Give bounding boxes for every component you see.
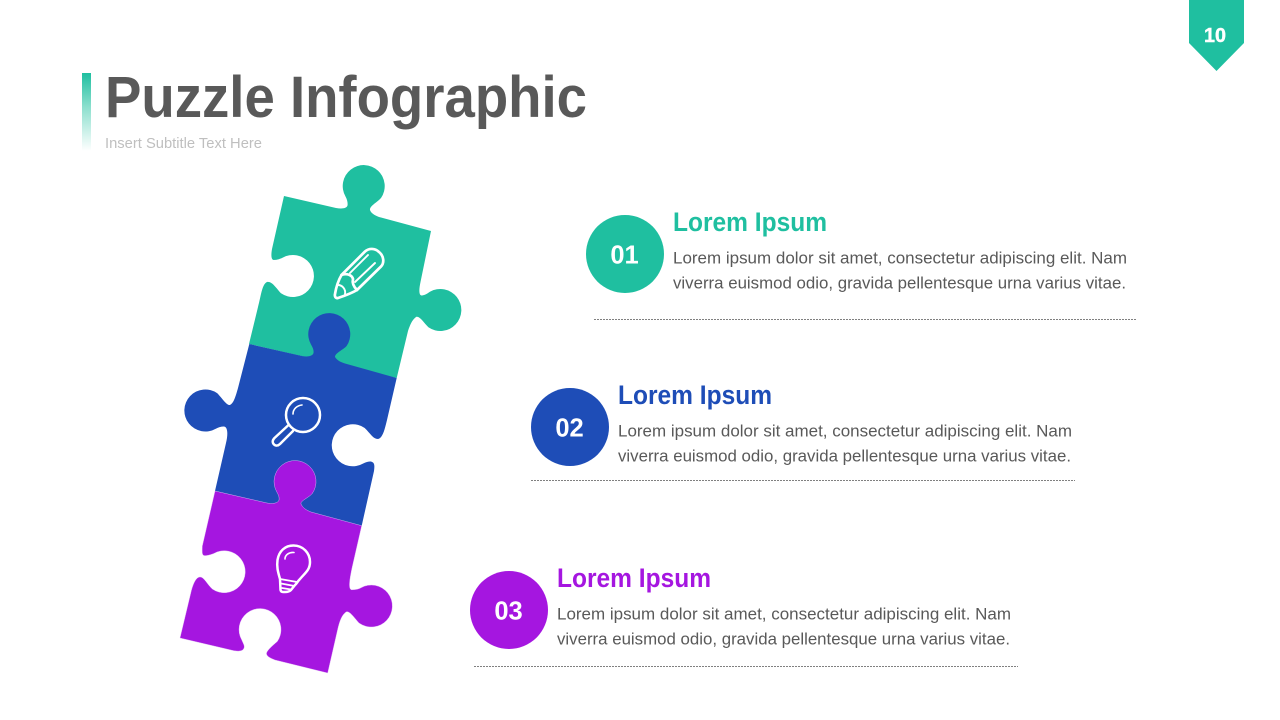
heading 02: Lorem Ipsum	[618, 380, 772, 410]
body text 03	[557, 606, 1011, 648]
body text 03: viverra euismod odio, gravida pellentesque urna varius vitae.	[557, 630, 1010, 648]
title accent bar	[82, 73, 91, 151]
icon: pencil	[335, 249, 383, 298]
body text 01: viverra euismod odio, gravida pellentesque urna varius vitae.	[673, 274, 1126, 292]
puzzle piece: blue	[184, 313, 397, 526]
number badge 02	[531, 388, 609, 466]
number badge 02: 02	[555, 414, 584, 442]
number badge 03	[470, 571, 548, 649]
icon: light bulb	[277, 546, 310, 592]
puzzle piece: purple	[180, 461, 392, 673]
item 01	[586, 207, 1127, 293]
title: Puzzle Infographic	[105, 65, 587, 130]
page number tag	[1189, 0, 1244, 71]
puzzle piece: teal	[249, 165, 461, 378]
body text 02: Lorem ipsum dolor sit amet, consectetur adipiscing elit. Nam	[618, 422, 1072, 440]
item 02	[531, 380, 1072, 466]
number badge 01	[586, 215, 664, 293]
heading 01: Lorem Ipsum	[673, 207, 827, 237]
body text 02	[618, 422, 1072, 466]
body text 01: Lorem ipsum dolor sit amet, consectetur adipiscing elit. Nam	[673, 250, 1127, 268]
body text 01	[673, 250, 1127, 292]
body text 02: viverra euismod odio, gravida pellentesque urna varius vitae.	[618, 448, 1071, 466]
heading 03: Lorem Ipsum	[557, 563, 711, 593]
number badge 03: 03	[494, 598, 523, 626]
puzzle stack	[180, 165, 461, 673]
body text 03: Lorem ipsum dolor sit amet, consectetur adipiscing elit. Nam	[557, 606, 1011, 624]
page number tag: 10	[1204, 25, 1226, 47]
number badge 01: 01	[610, 242, 639, 270]
item 03	[470, 563, 1011, 649]
subtitle: Insert Subtitle Text Here	[105, 136, 262, 152]
icon: magnifier	[273, 398, 320, 446]
